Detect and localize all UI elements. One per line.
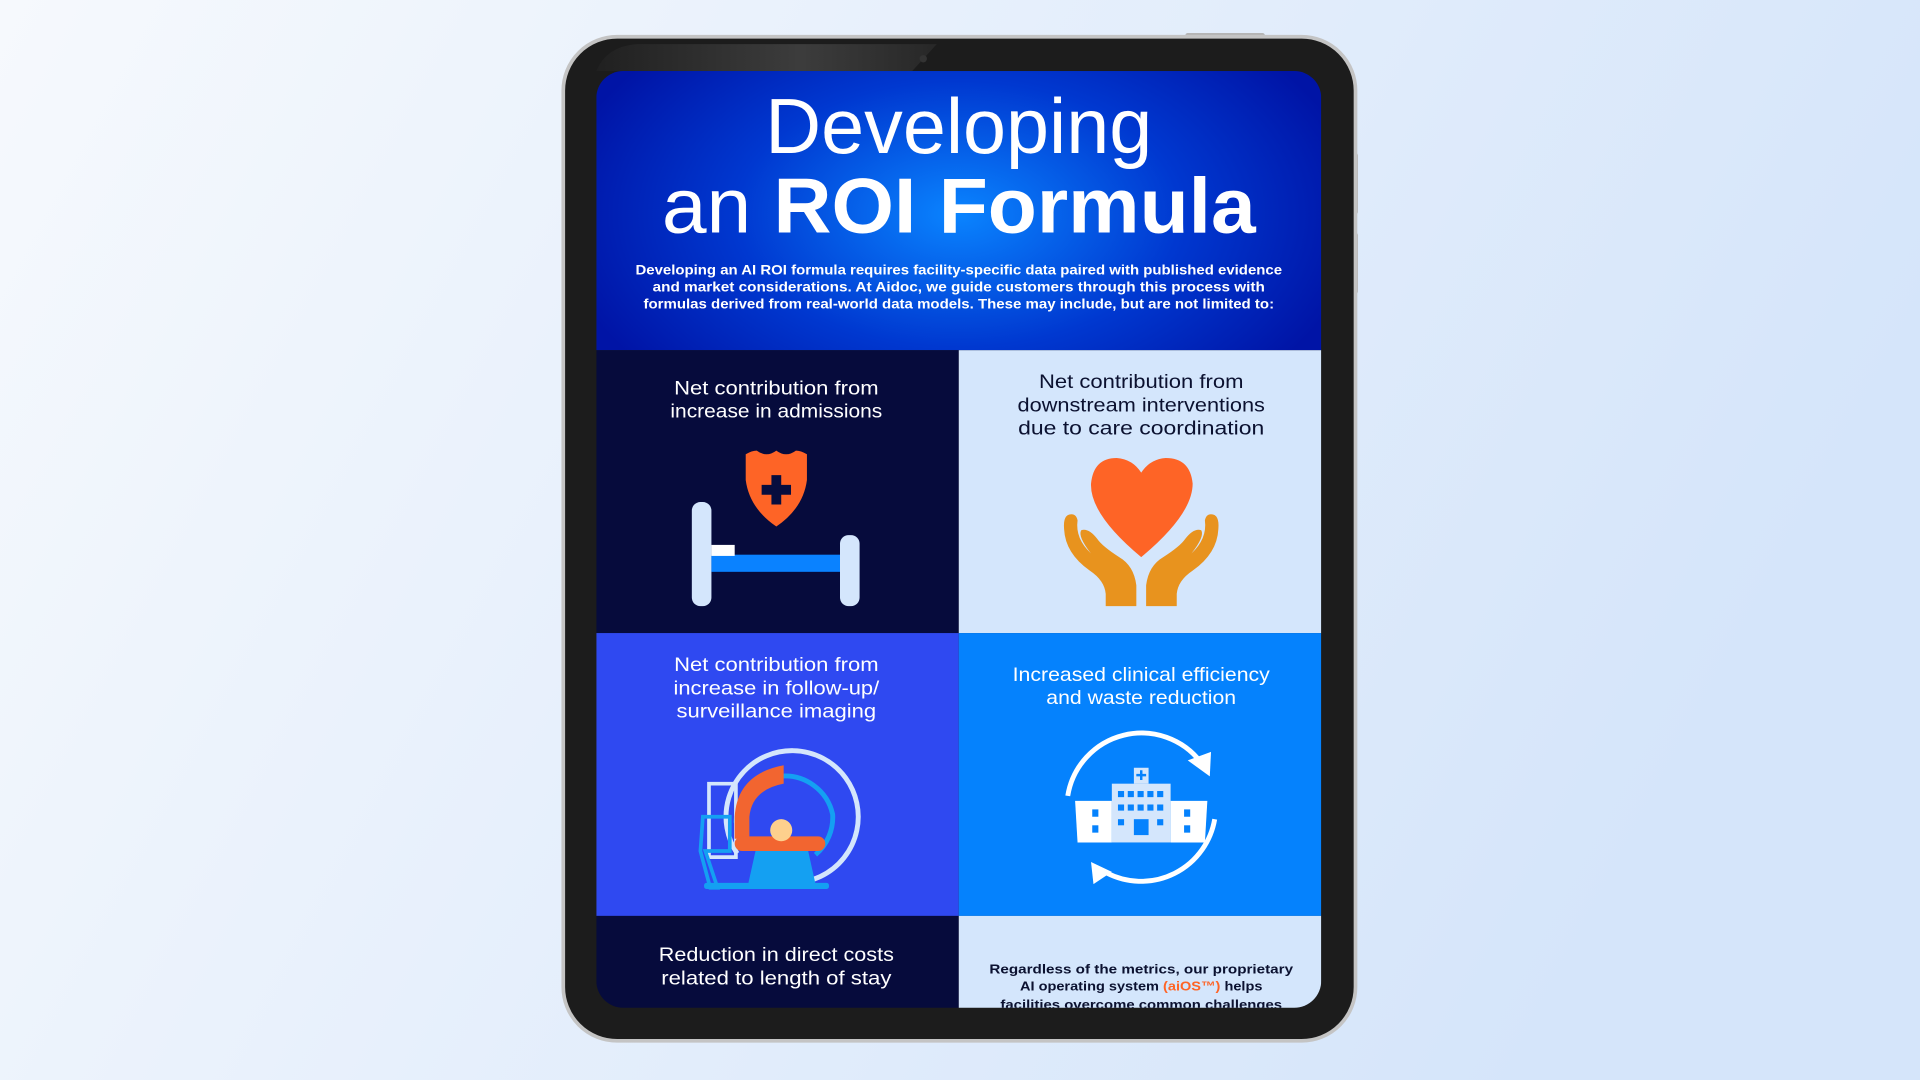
panel: aiOS callout: Regardless of the metrics, our proprietary: [989, 961, 1294, 976]
panel: clinical efficiency: Increased clinical efficiency: [1013, 665, 1270, 686]
panel: length of stay: related to length of stay: [661, 968, 892, 989]
title: an ROI Formula: [662, 162, 1257, 250]
panel: admissions: increase in admissions: [670, 402, 882, 423]
panel: aiOS callout: [959, 916, 1321, 1014]
panel: care coordination: [959, 350, 1321, 633]
panel: length of stay: [596, 916, 959, 1014]
icon: MRI scanner: [700, 751, 858, 889]
title: [665, 96, 1256, 234]
panel: admissions: [596, 350, 959, 633]
panel: care coordination: downstream interventions: [1018, 395, 1265, 416]
panel: aiOS callout: facilities overcome common challenges: [1000, 997, 1282, 1012]
intro paragraph: and market considerations. At Aidoc, we guide customers through this process with: [653, 279, 1265, 294]
panel: follow-up imaging: increase in follow-up/: [673, 678, 880, 699]
panel: care coordination: due to care coordination: [1018, 419, 1264, 440]
icon: heart in hands: [1064, 458, 1219, 606]
panel: length of stay: Reduction in direct costs: [659, 945, 894, 966]
tablet device: [563, 33, 1358, 1041]
panel: admissions: Net contribution from: [674, 378, 879, 399]
panel: clinical efficiency: and waste reduction: [1046, 688, 1236, 709]
header panel: [596, 71, 1321, 350]
panel: aiOS callout: AI operating system (aiOS™) helps: [1020, 979, 1262, 994]
panel: care coordination: Net contribution from: [1039, 372, 1243, 393]
icon: hospital with cycle arrows: [1068, 733, 1215, 884]
title: Developing: [765, 82, 1152, 170]
intro paragraph: formulas derived from real-world data models. These may include, but are not limited to:: [643, 297, 1274, 312]
panel: follow-up imaging: Net contribution from: [674, 655, 879, 676]
screen: [596, 71, 1321, 1014]
panel: clinical efficiency: [959, 633, 1321, 916]
icon: bed with shield: [692, 451, 860, 606]
panel: follow-up imaging: surveillance imaging: [677, 702, 876, 723]
intro paragraph: [636, 262, 1283, 312]
intro paragraph: Developing an AI ROI formula requires facility-specific data paired with published evidence: [636, 262, 1283, 277]
panel: follow-up imaging: [596, 633, 959, 916]
